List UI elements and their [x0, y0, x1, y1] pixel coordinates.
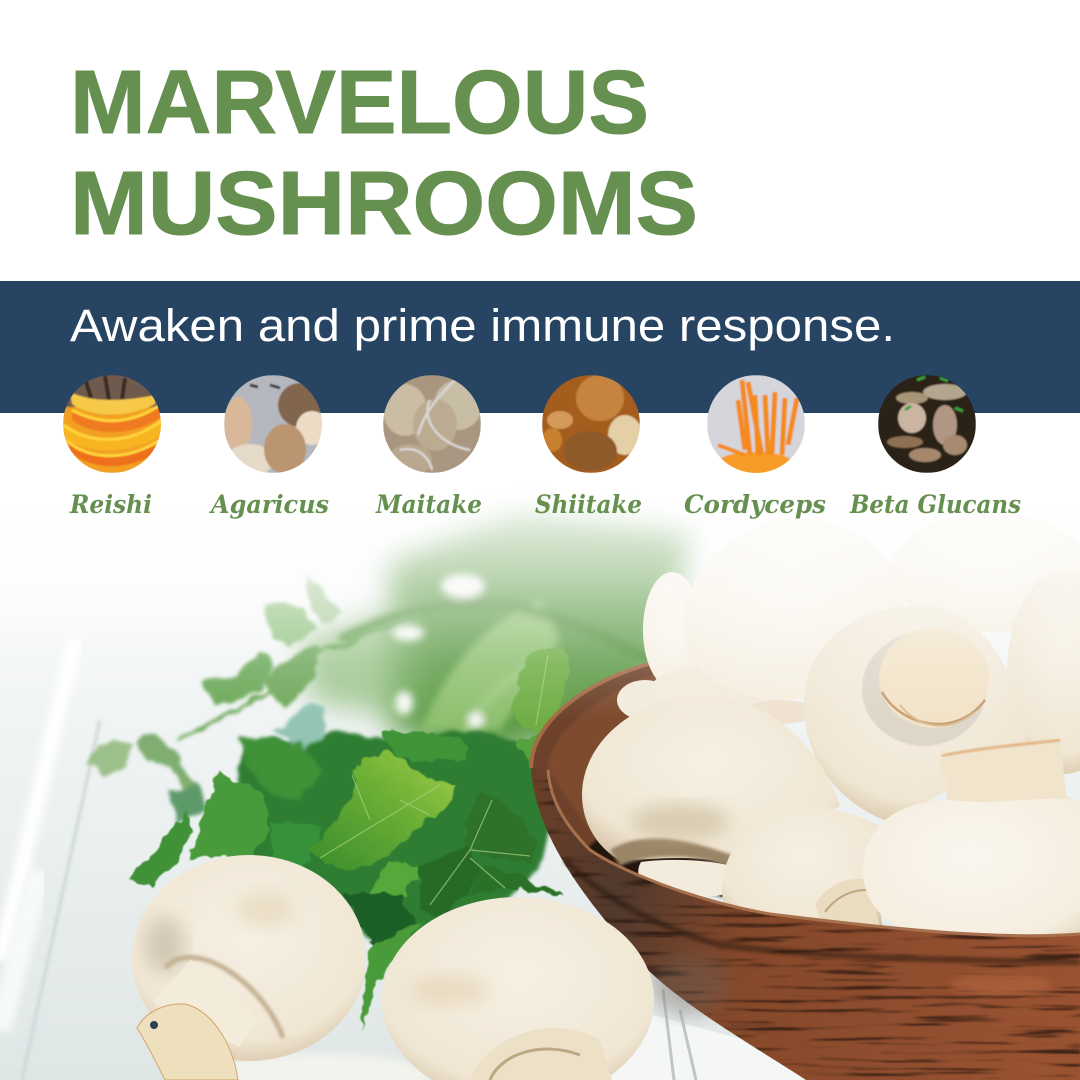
mushroom with upturned stem [804, 606, 1030, 822]
photo: parsley leaves [84, 575, 570, 1030]
labels: Shiitake [535, 490, 642, 519]
subtitle: Awaken and prime immune response. [70, 300, 895, 351]
icon: reishi [63, 375, 162, 473]
title [70, 53, 698, 254]
rear mushrooms [890, 512, 1080, 632]
mushroom on table, right [382, 897, 654, 1080]
title: MARVELOUS [70, 53, 649, 153]
middle green leaves [127, 644, 570, 1030]
icon: shiitake [542, 375, 642, 473]
labels: Agaricus [209, 490, 329, 519]
photo: mushrooms on table [132, 855, 654, 1080]
title: MUSHROOMS [70, 154, 698, 254]
photo: blurred background herbs [300, 510, 690, 760]
icon: maitake [383, 375, 482, 476]
mushroom, front right [863, 738, 1080, 942]
mushroom, front middle [722, 806, 884, 942]
mushroom on table, left [132, 855, 366, 1080]
white fade over top of photo [0, 450, 1080, 720]
photo: bowl back and inside [531, 664, 900, 914]
icon: cordyceps [707, 375, 805, 474]
icon: agaricus [224, 375, 328, 476]
photo: mushrooms in bowl [582, 512, 1080, 942]
labels [69, 490, 1021, 519]
upper left leaves, soft focus [84, 575, 420, 825]
labels: Beta Glucans [849, 490, 1021, 519]
navy band [0, 281, 1080, 413]
icon: beta glucans [878, 375, 976, 473]
labels: Cordyceps [684, 490, 826, 519]
mushroom, front left [582, 696, 840, 897]
labels: Maitake [375, 490, 482, 519]
labels: Reishi [69, 490, 152, 519]
photo: bowl front wall [520, 760, 1080, 1080]
background: white plank table [0, 480, 1080, 1080]
dark leaf mass [225, 730, 555, 960]
